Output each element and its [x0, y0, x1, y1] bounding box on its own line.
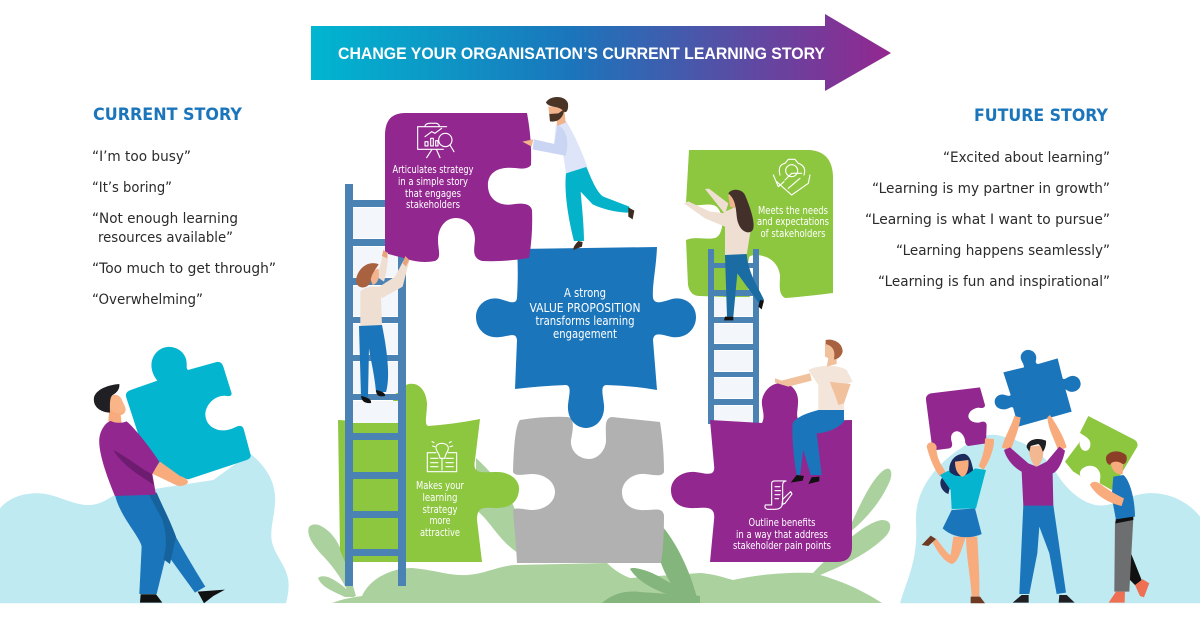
waistband	[1116, 517, 1133, 523]
neck and face	[548, 106, 566, 126]
arms	[377, 253, 409, 298]
panel: current story text	[92, 105, 276, 308]
face	[1029, 445, 1043, 467]
background blob	[0, 453, 289, 603]
text: meets the needs: of stakeholders	[760, 228, 826, 240]
shoes	[1013, 595, 1075, 603]
text: makes your learning strategy: learning	[422, 492, 458, 504]
puzzle piece: green lower left	[338, 384, 519, 562]
text: makes your learning strategy: more	[430, 515, 450, 527]
figure: woman climbing left ladder	[356, 250, 409, 326]
puzzle piece: green	[1065, 416, 1138, 490]
puzzle piece: purple	[926, 387, 987, 450]
boy	[1090, 451, 1149, 603]
neck and face	[108, 405, 125, 423]
quote list: current story: “I’m too busy”	[92, 149, 191, 165]
back leg	[1127, 547, 1142, 586]
text: outline benefits: Outline benefits	[748, 517, 816, 529]
face	[368, 268, 379, 285]
text: makes your learning strategy: Makes your	[416, 480, 465, 492]
shoes	[140, 590, 225, 603]
text: articulates strategy: stakeholders	[406, 199, 460, 211]
face	[955, 460, 969, 477]
trousers	[725, 254, 764, 317]
shoes	[573, 207, 634, 250]
head	[109, 395, 126, 413]
quote list: future story: “Learning is my partner in growth”	[872, 181, 1110, 197]
quote list: current story: “Too much to get through”	[92, 261, 276, 277]
hair	[728, 190, 754, 232]
text: value proposition: A strong	[564, 286, 606, 300]
hair and beard	[546, 97, 568, 122]
light leaves left	[308, 524, 356, 597]
dark ground	[602, 591, 700, 603]
text: outline benefits	[733, 517, 831, 552]
hair	[826, 340, 843, 359]
ground hill	[332, 563, 882, 603]
man	[1002, 415, 1075, 603]
figure: bearded man pushing purple piece	[522, 97, 634, 250]
banner title: CHANGE YOUR ORGANISATION’S CURRENT LEARNING STORY	[338, 44, 826, 63]
puzzle piece: gray	[513, 417, 664, 563]
other arm	[830, 382, 851, 405]
shirt	[533, 121, 587, 173]
quote list: current story: “Not enough learning	[92, 211, 238, 227]
text: outline benefits: in a way that address	[736, 529, 828, 541]
arms up	[1002, 415, 1067, 451]
shoes	[791, 475, 819, 484]
hair	[1106, 451, 1127, 465]
text: value proposition: VALUE PROPOSITION	[530, 301, 640, 315]
quote list: current story: “Overwhelming”	[92, 292, 203, 308]
top	[360, 287, 382, 326]
face	[825, 343, 837, 367]
text: makes your learning strategy: strategy	[422, 504, 458, 516]
arm	[1090, 482, 1124, 506]
trousers	[792, 410, 844, 475]
quote list: future story: “Learning is fun and inspirational”	[878, 274, 1110, 290]
leaf behind gray piece	[476, 458, 520, 553]
icon: presentation board with magnifier	[418, 123, 454, 158]
light leaves right	[813, 469, 891, 575]
trousers	[566, 166, 629, 241]
arm hand	[522, 139, 533, 147]
trousers	[115, 492, 205, 594]
shirt	[808, 366, 853, 411]
text: meets the needs	[757, 205, 829, 240]
face	[728, 193, 735, 208]
figure: woman on right ladder	[684, 189, 764, 320]
illustration: man carrying puzzle piece	[0, 347, 289, 603]
quote list: future story: “Learning happens seamlessly”	[896, 243, 1110, 259]
arms	[684, 189, 728, 227]
text: articulates strategy: Articulates strategy	[392, 164, 474, 176]
text: outline benefits: stakeholder pain points	[733, 540, 831, 552]
shoe	[1109, 592, 1125, 603]
arm	[152, 462, 188, 486]
puzzle piece: purple upper left	[385, 113, 532, 262]
quote list: future story: “Excited about learning”	[943, 150, 1110, 166]
illustration: team holding puzzle pieces	[900, 350, 1200, 603]
reaching arm	[775, 373, 812, 387]
ladder: right	[708, 249, 759, 424]
dark leaf lower	[630, 568, 700, 599]
hair	[94, 384, 119, 413]
icon: book with light bulb	[427, 442, 457, 472]
face	[1111, 460, 1123, 474]
text: makes your learning strategy: attractive	[420, 527, 460, 539]
top	[725, 205, 751, 255]
dark leaf centre	[661, 525, 697, 598]
jeans	[1019, 505, 1066, 594]
panel: future story text	[865, 106, 1110, 290]
icon: handshake with gear	[773, 159, 810, 195]
illustration: background plants	[308, 458, 891, 603]
puzzle piece: blue value proposition	[476, 247, 696, 428]
text: meets the needs: and expectations	[757, 216, 829, 228]
ladder: left	[345, 184, 406, 586]
arms	[927, 438, 994, 477]
legs	[933, 537, 979, 597]
sweater	[99, 421, 159, 496]
heading: current story: CURRENT STORY	[93, 105, 243, 124]
text: makes your learning strategy	[416, 480, 465, 539]
shoes	[724, 300, 764, 320]
quote list: future story: “Learning is what I want to pursue”	[865, 212, 1110, 228]
quote list: current story	[92, 149, 276, 308]
text: meets the needs: Meets the needs	[758, 205, 828, 217]
girl	[922, 438, 994, 603]
hair	[940, 454, 975, 494]
hair	[1027, 439, 1046, 452]
banner arrow	[311, 14, 891, 91]
shirt	[1112, 475, 1135, 520]
text: articulates strategy	[392, 164, 474, 211]
figure: man sitting on purple piece	[775, 340, 853, 484]
text: value proposition	[530, 286, 640, 341]
skirt	[943, 508, 982, 537]
sleeve	[533, 125, 567, 156]
puzzle piece: green upper right	[686, 150, 833, 298]
icon: scroll and pen	[765, 481, 792, 509]
shoes	[922, 536, 985, 603]
sweater fold	[113, 450, 154, 485]
text: articulates strategy: in a simple story	[398, 176, 468, 188]
quote list: current story: “It’s boring”	[92, 180, 172, 196]
quote list: current story: resources available”	[98, 230, 233, 246]
quote list: future story	[865, 150, 1110, 290]
text: value proposition: engagement	[553, 327, 617, 341]
puzzle piece: teal	[126, 347, 251, 479]
text: value proposition: transforms learning	[536, 314, 634, 328]
heading: future story: FUTURE STORY	[974, 106, 1109, 125]
grey trousers	[1114, 518, 1133, 592]
background blob	[900, 435, 1200, 603]
hair	[356, 263, 379, 287]
top	[940, 468, 986, 509]
trouser shadow	[148, 493, 176, 564]
puzzle piece: purple lower right	[671, 383, 852, 562]
figure: woman legs on left ladder	[359, 325, 388, 403]
text: articulates strategy: that engages	[405, 188, 461, 200]
puzzle piece: blue	[995, 350, 1081, 427]
sweater	[1004, 447, 1065, 506]
